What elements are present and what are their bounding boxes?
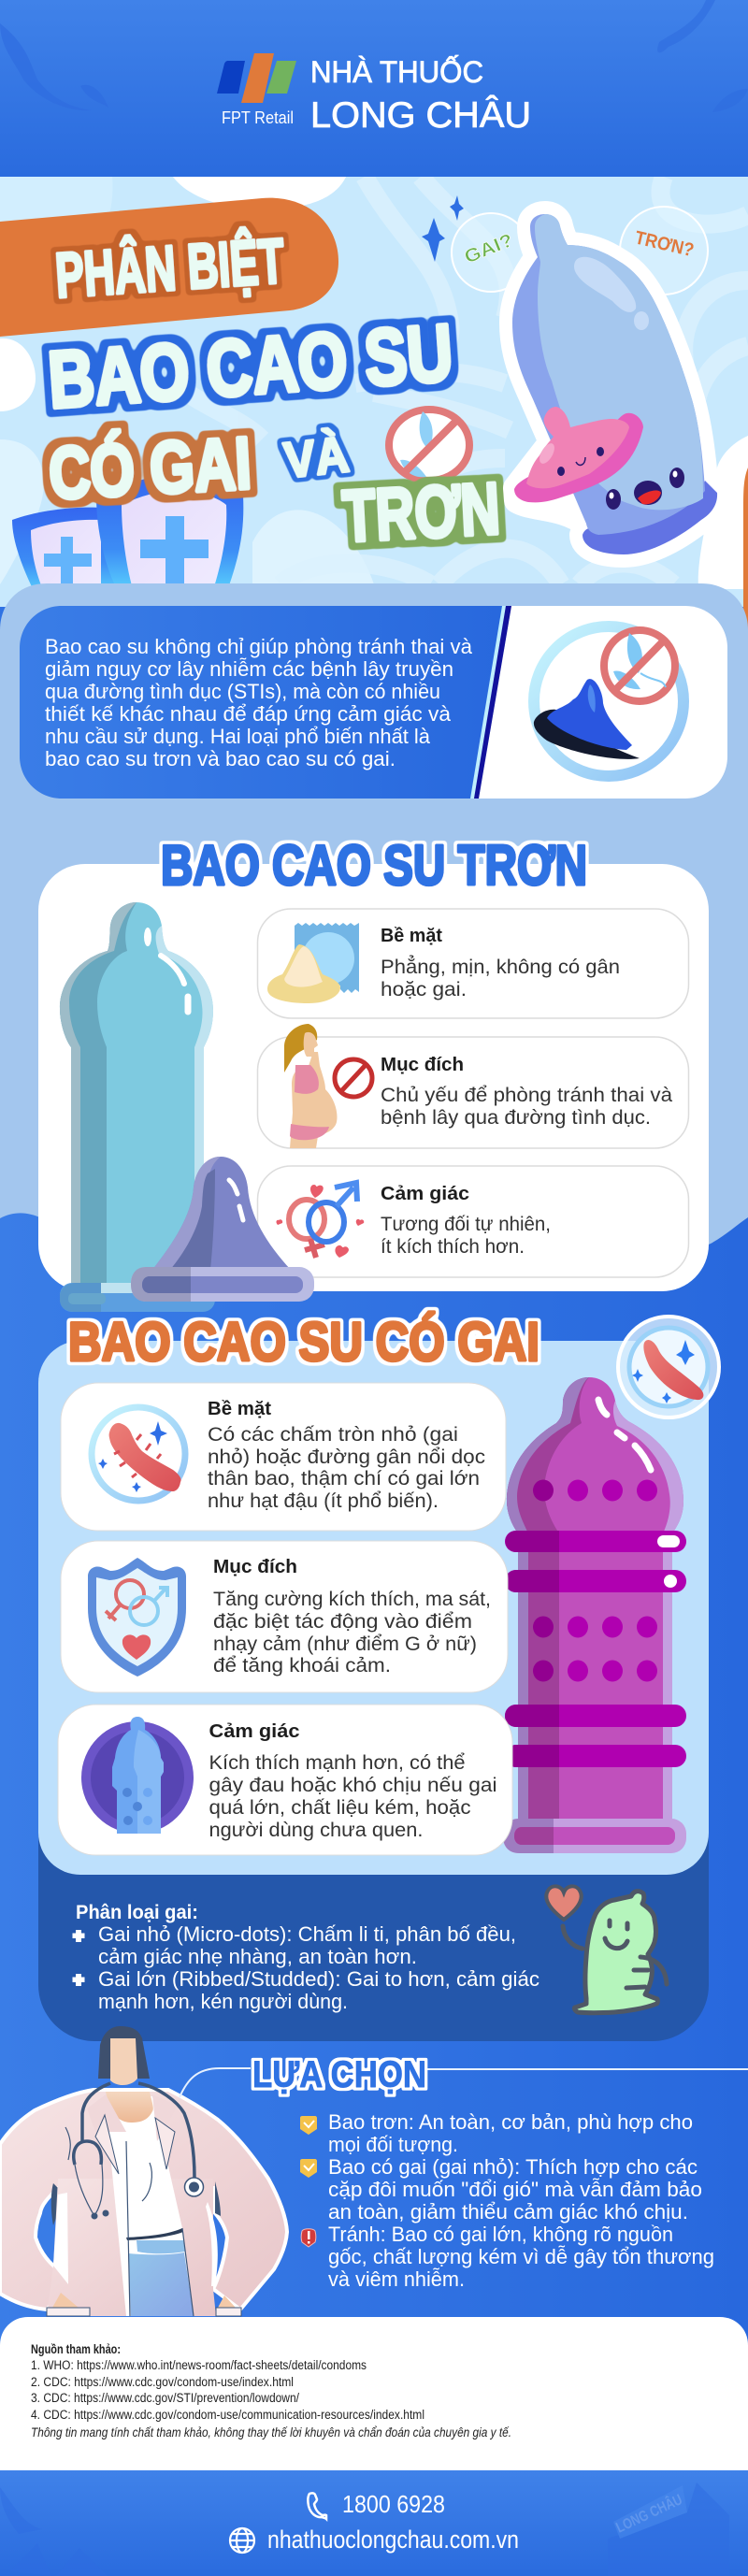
title: bao cao su trơn: BAO CAO SU TRƠN xyxy=(161,834,587,897)
panel: references xyxy=(0,2317,748,2470)
logo wordmark: Nhà Thuốc Long Châu: NHÀ THUỐC xyxy=(310,55,483,89)
decoration: store illustration: LONG CHÂU xyxy=(613,2490,685,2537)
text: studded feeling: Kích thích mạnh hơn, có thể xyxy=(209,1752,466,1774)
text: studded purpose: Mục đích xyxy=(213,1557,297,1577)
text: studded feeling: gây đau hoặc khó chịu nếu gai xyxy=(209,1775,497,1796)
website address: nhathuoclongchau.com.vn xyxy=(267,2526,519,2554)
list: choice advice: an toàn, giảm thiểu cảm giác khó chịu. xyxy=(328,2200,688,2223)
card: smooth feeling xyxy=(258,1166,688,1277)
bubble: gai?: GAI? xyxy=(462,230,516,268)
text: surface: hoặc gai. xyxy=(381,979,467,1000)
text block: spike classification: Gai nhỏ (Micro-dots): Chấm li ti, phân bố đều, xyxy=(98,1922,516,1946)
illustration: big studded purple condom xyxy=(503,1377,686,1853)
list: choice advice: Tránh: Bao có gai lớn, không rõ nguồn xyxy=(328,2223,673,2246)
heading: trơn: TRƠN xyxy=(340,467,502,557)
icon: studded condom in purple circle xyxy=(81,1717,194,1834)
text: surface xyxy=(381,926,620,1000)
connector line to choice heading xyxy=(180,2068,748,2097)
text: studded surface: nhỏ) hoặc đường gân nổi dọc xyxy=(208,1446,485,1468)
bubble: trơn?: TRƠN? xyxy=(633,227,696,261)
text: purpose: bệnh lây qua đường tình dục. xyxy=(381,1107,651,1129)
text: reference list: 1. WHO: https://www.who.int/news-room/fact-sheets/detail/condoms xyxy=(31,2358,367,2372)
title: bao cao su có gai: BAO CAO SU CÓ GAI xyxy=(68,1312,539,1373)
text: surface: Bề mặt xyxy=(381,926,442,946)
illustration: large blue condom xyxy=(60,902,215,1312)
icon: shield with gender symbols and heart xyxy=(88,1558,186,1677)
icon: telephone xyxy=(308,2493,326,2519)
footer band xyxy=(0,2470,748,2576)
text: feeling: Cảm giác xyxy=(381,1184,469,1204)
card: smooth surface xyxy=(258,909,688,1018)
text: studded surface xyxy=(208,1399,485,1512)
text: reference list: Nguồn tham khảo: xyxy=(31,2342,121,2356)
heading: bao cao su: BAO CAO SU xyxy=(46,309,455,425)
orange edge accent on right xyxy=(698,436,748,636)
icon: gender symbols with hearts xyxy=(276,1183,364,1258)
list: choice advice: cặp đôi muốn "đổi gió" mà vẫn đảm bảo xyxy=(328,2178,702,2201)
icon: spiked sausage bubble xyxy=(618,1317,719,1418)
text: studded purpose xyxy=(213,1557,491,1677)
text: studded feeling: Cảm giác xyxy=(209,1721,299,1742)
intro paragraph: giảm nguy cơ lây nhiễm các bệnh lây truyền xyxy=(45,657,453,681)
list: choice advice: và viêm nhiễm. xyxy=(328,2267,465,2291)
intro paragraph: qua đường tình dục (STIs), mà còn có nhiều xyxy=(45,680,440,703)
text: studded surface: thân bao, thậm chí có gai lớn xyxy=(208,1468,480,1489)
panel: light blue content background xyxy=(0,583,748,1253)
icon: no sperm sign xyxy=(389,410,469,481)
icon: yellow check badge xyxy=(300,2116,317,2135)
icon: unwrapped condom packet xyxy=(267,923,359,1003)
intro paragraph: Bao cao su không chỉ giúp phòng tránh thai và xyxy=(45,635,473,658)
text: studded surface: Bề mặt xyxy=(208,1399,271,1419)
intro paragraph: thiết kế khác nhau để đáp ứng cảm giác và xyxy=(45,702,452,726)
icon: spiked sausage in ring xyxy=(92,1407,185,1501)
card: studded purpose xyxy=(61,1541,508,1692)
text: studded purpose: Tăng cường kích thích, ma sát, xyxy=(213,1589,491,1610)
list: choice advice: gốc, chất lượng kém vì dễ gây tổn thương xyxy=(328,2245,714,2268)
hero background xyxy=(0,177,748,607)
text: studded purpose: nhạy cảm (như điểm G ở nữ) xyxy=(213,1633,477,1655)
icon: condom with no-sperm sign xyxy=(534,626,683,776)
orange title banner xyxy=(0,198,338,337)
logo wordmark: Nhà Thuốc Long Châu: LONG CHÂU xyxy=(310,95,531,136)
text block: spike classification: Gai lớn (Ribbed/Studded): Gai to hơn, cảm giác xyxy=(98,1967,539,1991)
logo: FPT Retail xyxy=(217,53,296,127)
text block: spike classification xyxy=(73,1902,539,2013)
icon: yellow check badge xyxy=(300,2159,317,2178)
text block: spike classification: cảm giác nhẹ nhàng, an toàn hơn. xyxy=(98,1945,417,1968)
text block: spike classification: Phân loại gai: xyxy=(76,1902,198,1923)
illustration: green condom with heart balloon xyxy=(546,1886,667,2013)
panel: textured condom light card xyxy=(38,1341,709,1875)
text: surface: Phẳng, mịn, không có gân xyxy=(381,956,620,978)
logo wordmark: Nhà Thuốc Long Châu xyxy=(310,55,531,136)
text: feeling: ít kích thích hơn. xyxy=(381,1236,525,1258)
text: purpose xyxy=(381,1055,672,1129)
header band xyxy=(0,0,748,177)
intro paragraph: bao cao su trơn và bao cao su có gai. xyxy=(45,747,396,770)
panel: dark classification background xyxy=(38,1823,709,2041)
panel: intro card xyxy=(20,606,727,799)
heading: lựa chọn: LỰA CHỌN xyxy=(252,2054,426,2095)
text: feeling xyxy=(381,1184,551,1258)
list: choice advice: Bao có gai (gai nhỏ): Thích hợp cho các xyxy=(328,2155,698,2179)
text: studded feeling: người dùng chưa quen. xyxy=(209,1820,423,1841)
list: choice advice: mọi đối tượng. xyxy=(328,2133,458,2156)
text: purpose: Chủ yếu để phòng tránh thai và xyxy=(381,1085,672,1106)
icon: red warning badge xyxy=(301,2229,316,2247)
intro paragraph: nhu cầu sử dụng. Hai loại phổ biến nhất là xyxy=(45,725,431,748)
icon: globe xyxy=(230,2528,254,2553)
illustration: doctor with stethoscope xyxy=(0,2026,287,2316)
icon: shields with cross xyxy=(12,475,243,598)
panel: smooth condom card xyxy=(38,864,709,1291)
text: studded surface: Có các chấm tròn nhỏ (gai xyxy=(208,1424,458,1446)
heading: và: VÀ xyxy=(281,426,352,489)
text: purpose: Mục đích xyxy=(381,1055,464,1075)
card: smooth purpose xyxy=(258,1024,688,1148)
text: reference list: Thông tin mang tính chất tham khảo, không thay thế lời khuyên và chẩn đoán của chuyên gia y tế. xyxy=(31,2425,511,2439)
text: reference list: 2. CDC: https://www.cdc.gov/condom-use/index.html xyxy=(31,2375,294,2389)
phone number: 1800 6928 xyxy=(342,2490,445,2518)
card: studded surface xyxy=(61,1383,506,1531)
text: studded purpose: để tăng khoái cảm. xyxy=(213,1655,391,1677)
decoration: store illustration xyxy=(0,2482,729,2576)
text: studded purpose: đặc biệt tác động vào điểm xyxy=(213,1611,472,1633)
heading: có gai: CÓ GAI xyxy=(47,422,253,514)
card: studded feeling xyxy=(58,1705,512,1855)
text: reference list: 3. CDC: https://www.cdc.gov/STI/prevention/lowdown/ xyxy=(31,2391,299,2405)
list: choice advice: Bao trơn: An toàn, cơ bản, phù hợp cho xyxy=(328,2110,693,2134)
text: reference list xyxy=(31,2342,511,2439)
text: studded feeling: quá lớn, chất liệu kém, hoặc xyxy=(209,1797,471,1819)
heading: phân biệt: PHÂN BIỆT xyxy=(53,224,286,311)
logo: FPT Retail: FPT Retail xyxy=(222,108,294,127)
panel: blue wave section background xyxy=(0,1213,748,2576)
icon: pregnant woman with prohibition sign xyxy=(284,1024,372,1148)
mascot: smiling condom character xyxy=(512,214,717,554)
text: studded feeling xyxy=(209,1721,497,1841)
bubble: gai? xyxy=(452,213,530,292)
bubble: trơn? xyxy=(620,207,708,295)
text: studded surface: như hạt đậu (ít phổ biến). xyxy=(208,1490,439,1512)
text block: spike classification: mạnh hơn, kén người dùng. xyxy=(98,1990,348,2013)
illustration: small purple condom xyxy=(131,1157,314,1302)
text: reference list: 4. CDC: https://www.cdc.gov/condom-use/communication-resources/index.html xyxy=(31,2408,424,2422)
icon: sparkles xyxy=(422,195,464,262)
intro paragraph xyxy=(45,635,473,770)
list: choice advice xyxy=(300,2110,714,2291)
text: feeling: Tương đối tự nhiên, xyxy=(381,1214,551,1235)
